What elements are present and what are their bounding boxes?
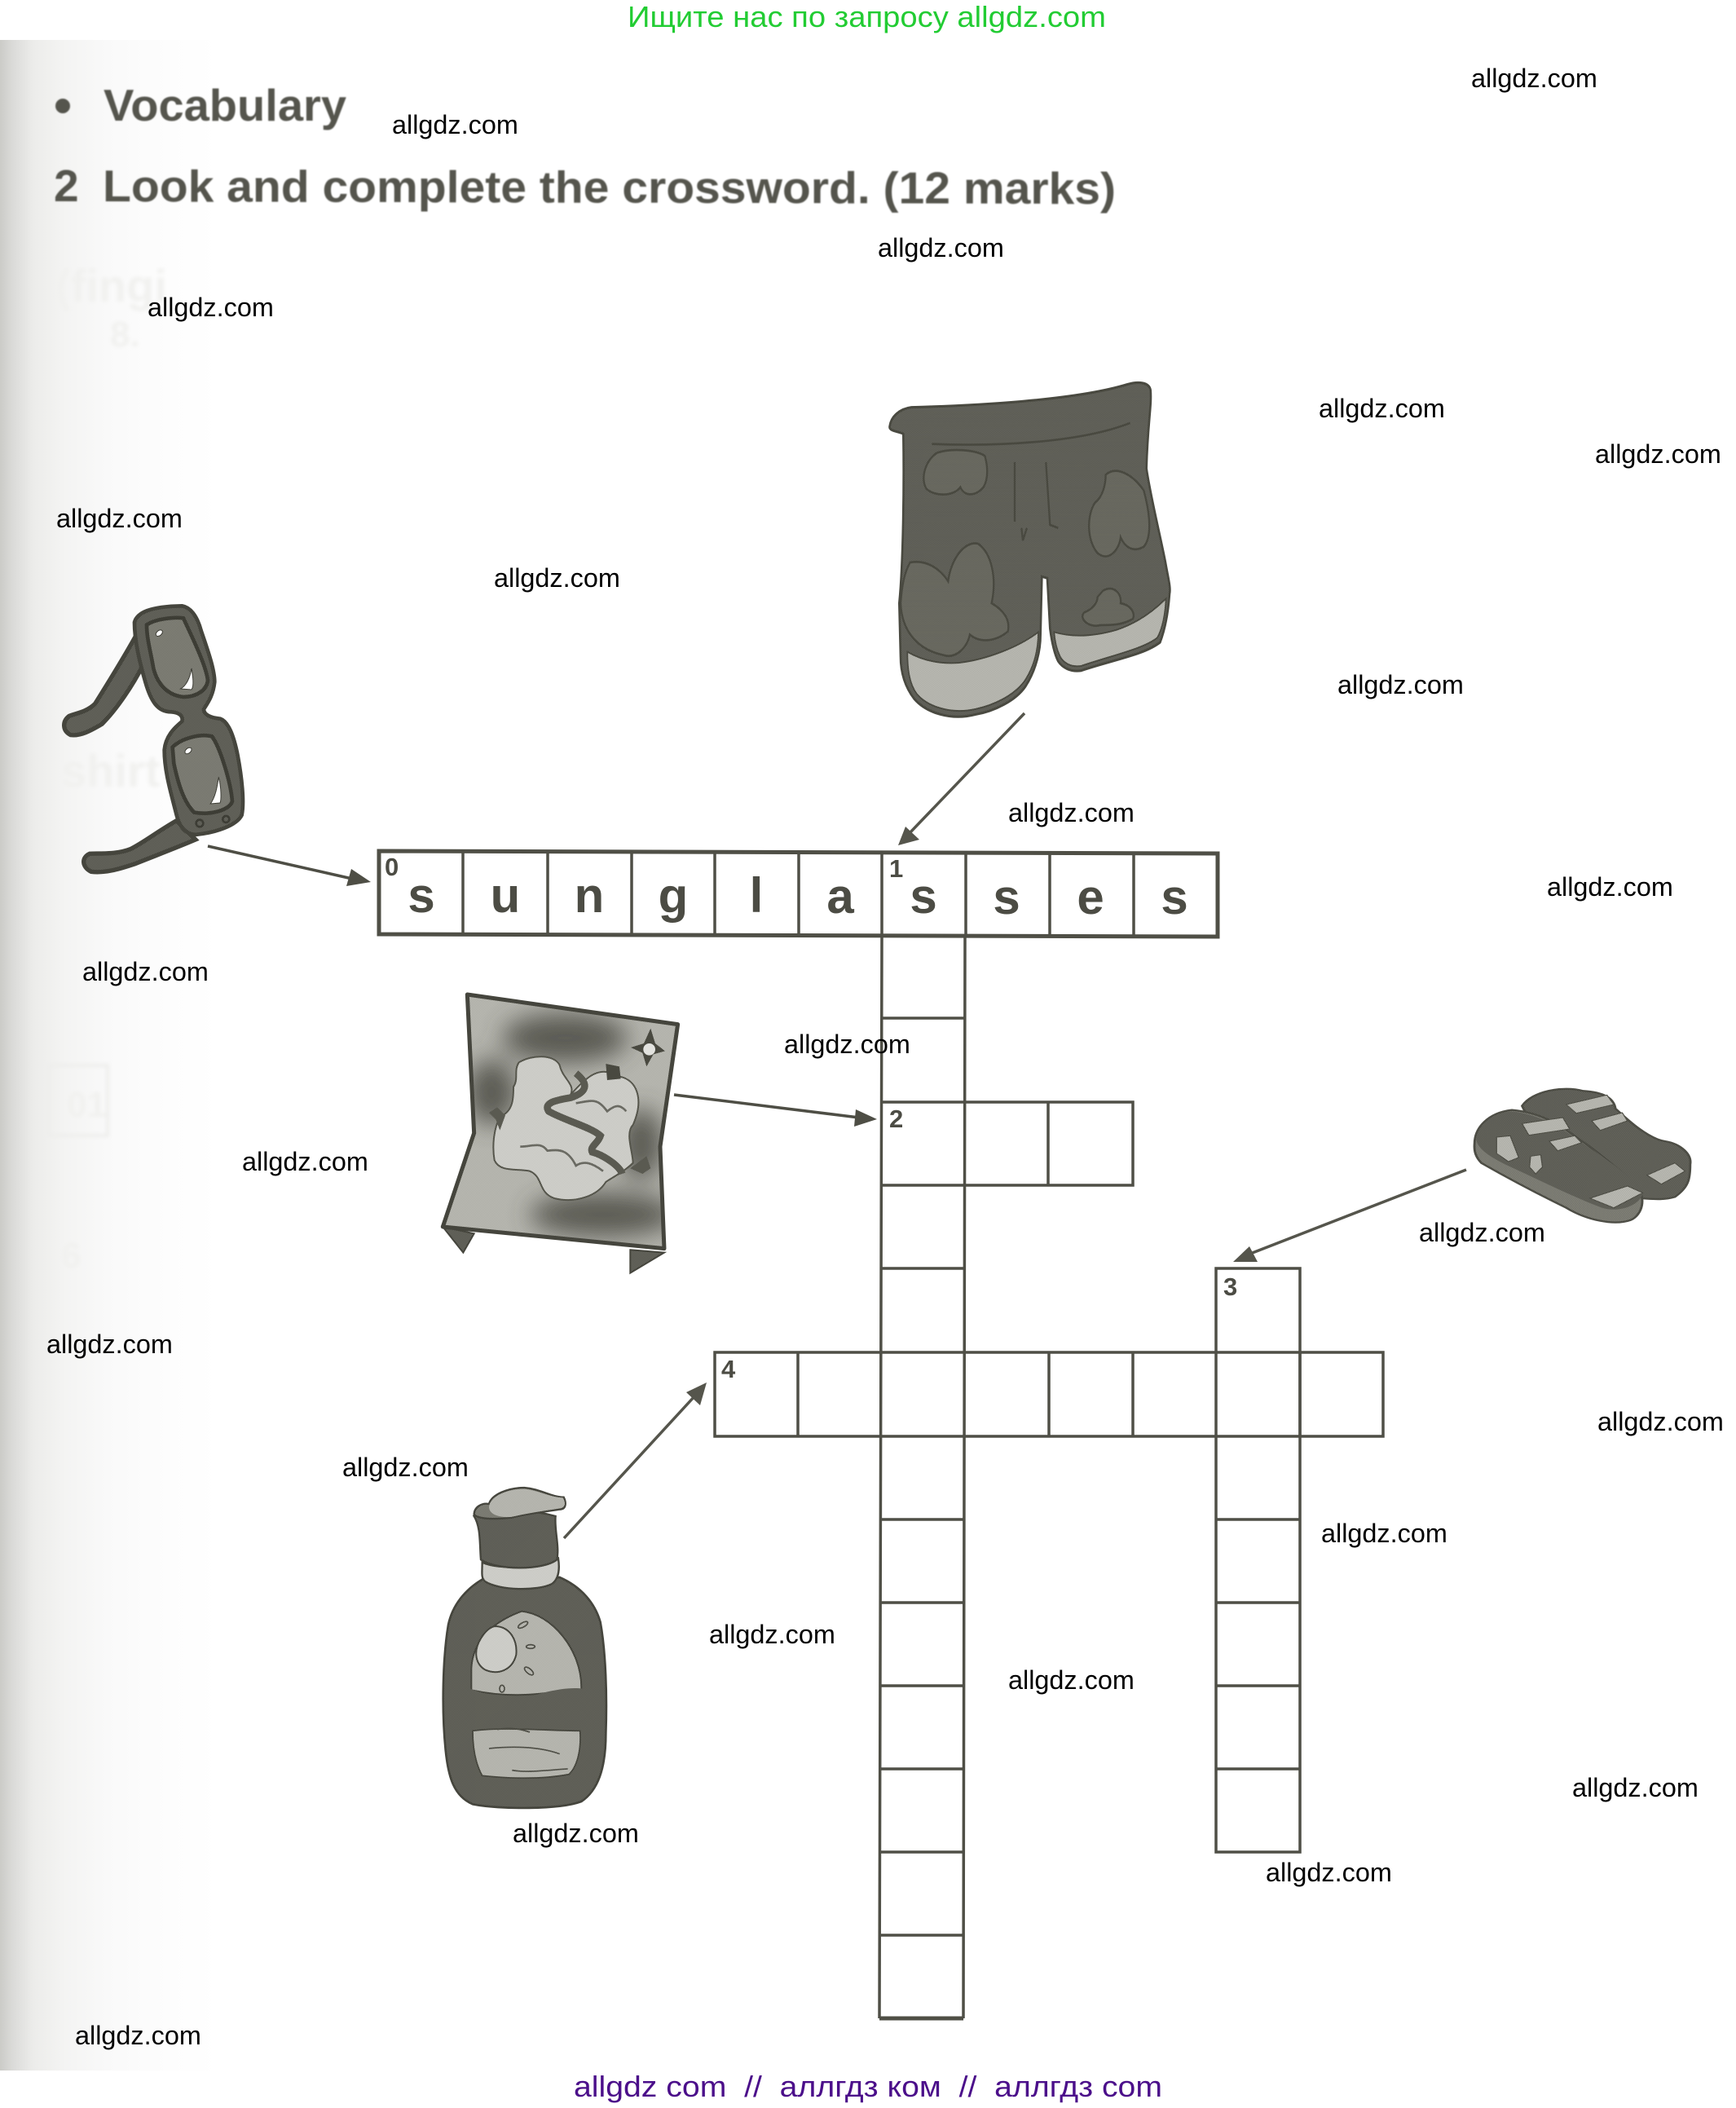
crossword: row 2 xyxy=(883,1102,1133,1185)
watermarks: allgdz.com xyxy=(1595,439,1721,469)
faint show-through text: 8. xyxy=(110,315,140,355)
faint show-through text xyxy=(49,260,167,1276)
watermarks: allgdz.com xyxy=(784,1030,910,1059)
crossword: answer letters: s xyxy=(1161,870,1188,924)
watermarks: allgdz.com xyxy=(513,1819,639,1848)
watermarks: allgdz.com xyxy=(148,293,274,322)
watermarks: allgdz.com xyxy=(1547,872,1673,902)
crossword: clue numbers xyxy=(385,853,1237,1383)
bottle: label sky xyxy=(471,1612,581,1695)
watermarks: allgdz.com xyxy=(392,110,518,139)
header: search prompt: Ищите нас по запросу allgdz.com xyxy=(628,0,1106,33)
crossword: answer letters: n xyxy=(575,868,604,923)
watermarks: allgdz.com xyxy=(1266,1858,1392,1887)
crossword: answer letters: s xyxy=(993,870,1020,924)
crossword: answer letters: l xyxy=(750,868,763,923)
faint show-through text: 6 xyxy=(61,1236,81,1276)
crossword: clue numbers: 0 xyxy=(385,853,399,881)
crossword: answer letters: a xyxy=(826,869,854,924)
crossword: column 1 xyxy=(879,937,965,2018)
icon: sandals xyxy=(1474,1089,1690,1223)
crossword: answer letters: u xyxy=(491,868,520,923)
crossword: answer letters: g xyxy=(659,868,688,923)
sandals: light straps xyxy=(1496,1095,1685,1208)
bottle: collar xyxy=(482,1559,559,1589)
crossword: clue numbers: 2 xyxy=(889,1105,903,1133)
watermarks: allgdz.com xyxy=(242,1147,368,1176)
faint show-through text: (fingi xyxy=(55,260,167,311)
arrow: map to 2 across xyxy=(674,1095,877,1127)
bottle: label dark band xyxy=(470,1688,583,1731)
watermarks: allgdz.com xyxy=(1419,1218,1545,1247)
icon: sunglasses xyxy=(64,606,243,872)
watermarks: allgdz.com xyxy=(342,1453,469,1482)
sunglasses: lower lens xyxy=(173,735,232,814)
icon: map xyxy=(443,994,678,1273)
map: river and mountains xyxy=(548,1074,622,1174)
sandals: back sandal xyxy=(1522,1089,1690,1199)
heading: Vocabulary: Vocabulary xyxy=(104,80,346,130)
shorts: left hem xyxy=(907,632,1038,711)
crossword: column 3 xyxy=(1216,1268,1300,1852)
watermarks: allgdz.com xyxy=(82,957,209,986)
map: land xyxy=(493,1056,638,1200)
faint show-through text: 01 xyxy=(67,1085,107,1125)
bottle: sun xyxy=(476,1626,517,1672)
crossword: answer letters: s xyxy=(408,868,435,923)
watermarks: allgdz.com xyxy=(1321,1519,1447,1548)
instruction heading: 2 xyxy=(54,161,79,211)
shorts: waistband and flower pattern xyxy=(901,423,1149,656)
crossword: clue numbers: 3 xyxy=(1223,1272,1237,1301)
watermarks: allgdz.com xyxy=(46,1330,173,1359)
map: dark shading xyxy=(467,1013,676,1237)
arrow: sunglasses to 0 across xyxy=(208,846,371,886)
arrow: shorts to 1 across/down xyxy=(898,713,1024,845)
watermarks: allgdz.com xyxy=(709,1620,835,1649)
sandals: front footbed xyxy=(1476,1111,1642,1210)
watermarks: allgdz.com xyxy=(878,233,1004,262)
crossword: row 4 xyxy=(715,1352,1383,1436)
bottle: cap xyxy=(474,1511,557,1568)
watermarks: allgdz.com xyxy=(56,504,183,533)
crossword: answer letters: s xyxy=(910,869,937,924)
arrow: bottle to 4 across xyxy=(564,1383,707,1538)
sandals: front sole rim xyxy=(1474,1110,1642,1223)
icon: swimming shorts xyxy=(890,382,1170,717)
crossword: clue numbers: 4 xyxy=(721,1355,736,1383)
crossword: row 0 sunglasses xyxy=(379,851,1218,937)
faint show-through text: shirt xyxy=(61,745,160,796)
instruction heading: Look and complete the crossword. (12 marks) xyxy=(103,161,1116,214)
watermarks: allgdz.com xyxy=(1319,394,1445,423)
sunglasses: upper lens xyxy=(147,618,208,697)
arrow: sandals to 3 down xyxy=(1233,1170,1466,1262)
bottle: label water xyxy=(473,1729,580,1778)
crossword: answer letters: e xyxy=(1077,870,1104,924)
crossword: answer letters xyxy=(408,868,1188,924)
watermarks: allgdz.com xyxy=(1008,1665,1135,1695)
watermarks: allgdz.com xyxy=(1337,670,1464,699)
map: compass star xyxy=(631,1029,665,1066)
watermarks: allgdz.com xyxy=(1597,1407,1724,1436)
watermarks: allgdz.com xyxy=(75,2021,201,2050)
crossword: clue numbers: 1 xyxy=(889,854,903,883)
footer: site names: allgdz com // аллгдз ком // аллгдз com xyxy=(574,2070,1162,2103)
watermarks: allgdz.com xyxy=(494,563,620,593)
watermarks: allgdz.com xyxy=(1471,64,1597,93)
shorts: right hem xyxy=(1054,598,1166,666)
watermarks: allgdz.com xyxy=(1008,798,1135,827)
watermarks: allgdz.com xyxy=(1572,1773,1699,1802)
sunglasses: highlights xyxy=(155,628,221,804)
icon: sun cream bottle xyxy=(443,1488,606,1808)
